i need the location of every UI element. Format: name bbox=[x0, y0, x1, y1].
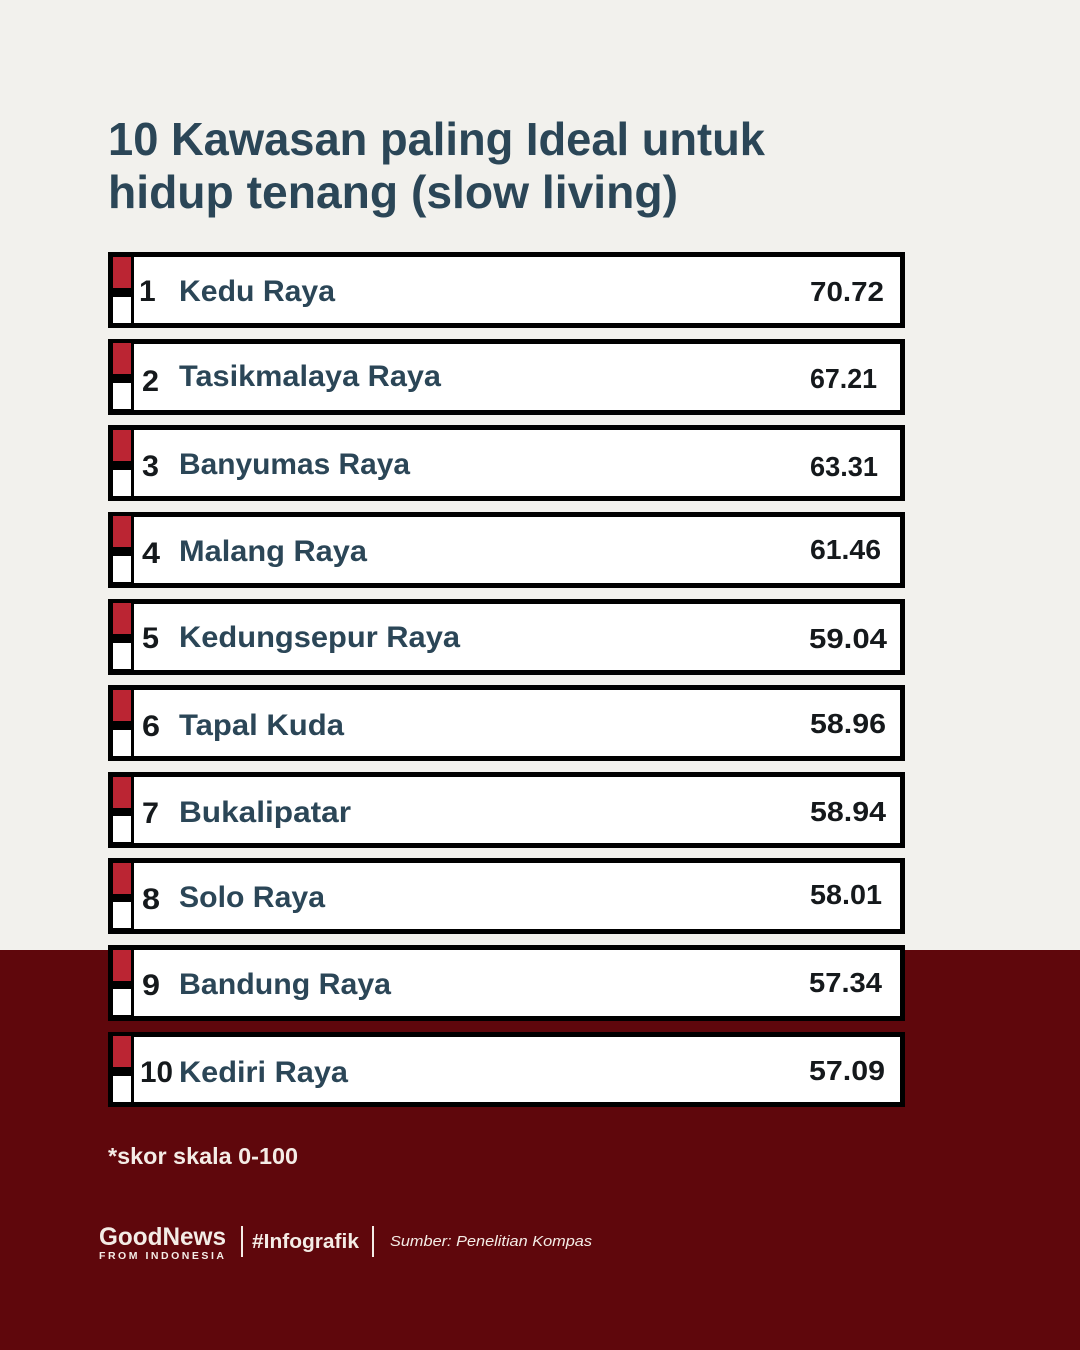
row 6: Tapal Kuda: 6 bbox=[142, 710, 160, 743]
title bbox=[108, 113, 765, 218]
row 6: Tapal Kuda: 58.96 bbox=[810, 708, 886, 739]
row 7: Bukalipatar bbox=[108, 772, 905, 848]
row 7: Bukalipatar: 7 bbox=[142, 797, 159, 830]
row 5: Kedungsepur Raya: 5 bbox=[142, 622, 159, 655]
row 6: Tapal Kuda: Tapal Kuda bbox=[179, 709, 344, 742]
row 1: Kedu Raya: Kedu Raya bbox=[179, 275, 335, 308]
row 10: Kediri Raya: 10 bbox=[140, 1056, 173, 1089]
row 9: Bandung Raya bbox=[108, 945, 905, 1021]
footer bbox=[99, 1223, 593, 1262]
row 4: Malang Raya: 4 bbox=[142, 537, 160, 570]
row 4: Malang Raya bbox=[108, 512, 905, 588]
row 5: Kedungsepur Raya: 59.04 bbox=[809, 623, 887, 654]
logo: GoodNews from Indonesia: GoodNews bbox=[99, 1223, 226, 1251]
source: Sumber: Penelitian Kompas bbox=[390, 1233, 593, 1250]
row 2: Tasikmalaya Raya: 67.21 bbox=[810, 363, 877, 394]
row 3: Banyumas Raya: 3 bbox=[142, 450, 159, 483]
row 8: Solo Raya: 8 bbox=[142, 883, 160, 916]
row 5: Kedungsepur Raya: Kedungsepur Raya bbox=[179, 621, 460, 654]
row 2: Tasikmalaya Raya: 2 bbox=[142, 365, 159, 398]
row 5: Kedungsepur Raya bbox=[108, 599, 905, 675]
row 2: Tasikmalaya Raya bbox=[108, 339, 905, 415]
row 9: Bandung Raya: Bandung Raya bbox=[179, 968, 391, 1001]
row 10: Kediri Raya: Kediri Raya bbox=[179, 1056, 348, 1089]
row 8: Solo Raya: Solo Raya bbox=[179, 881, 325, 914]
hashtag: #Infografik bbox=[252, 1231, 360, 1253]
title: hidup tenang (slow living) bbox=[108, 166, 678, 218]
row 9: Bandung Raya: 9 bbox=[142, 969, 160, 1002]
ranking list bbox=[108, 252, 905, 1107]
row 3: Banyumas Raya: Banyumas Raya bbox=[179, 448, 410, 481]
row 3: Banyumas Raya bbox=[108, 425, 905, 501]
row 1: Kedu Raya: 70.72 bbox=[810, 276, 884, 307]
row 1: Kedu Raya bbox=[108, 252, 905, 328]
row 10: Kediri Raya bbox=[108, 1032, 905, 1107]
title: 10 Kawasan paling Ideal untuk bbox=[108, 113, 765, 165]
row 4: Malang Raya: 61.46 bbox=[810, 534, 881, 565]
row 6: Tapal Kuda bbox=[108, 685, 905, 761]
row 1: Kedu Raya: 1 bbox=[139, 275, 156, 308]
logo: GoodNews from Indonesia: FROM INDONESIA bbox=[99, 1250, 224, 1262]
row 7: Bukalipatar: Bukalipatar bbox=[179, 796, 351, 829]
dark red background band bbox=[0, 950, 1080, 1350]
footnote: *skor skala 0-100 bbox=[108, 1143, 298, 1169]
row 8: Solo Raya bbox=[108, 858, 905, 934]
row 10: Kediri Raya: 57.09 bbox=[809, 1055, 885, 1086]
row 4: Malang Raya: Malang Raya bbox=[179, 535, 367, 568]
row 9: Bandung Raya: 57.34 bbox=[809, 967, 882, 998]
row 8: Solo Raya: 58.01 bbox=[810, 879, 882, 910]
row 3: Banyumas Raya: 63.31 bbox=[810, 451, 878, 482]
row 2: Tasikmalaya Raya: Tasikmalaya Raya bbox=[179, 360, 441, 393]
row 7: Bukalipatar: 58.94 bbox=[810, 796, 886, 827]
